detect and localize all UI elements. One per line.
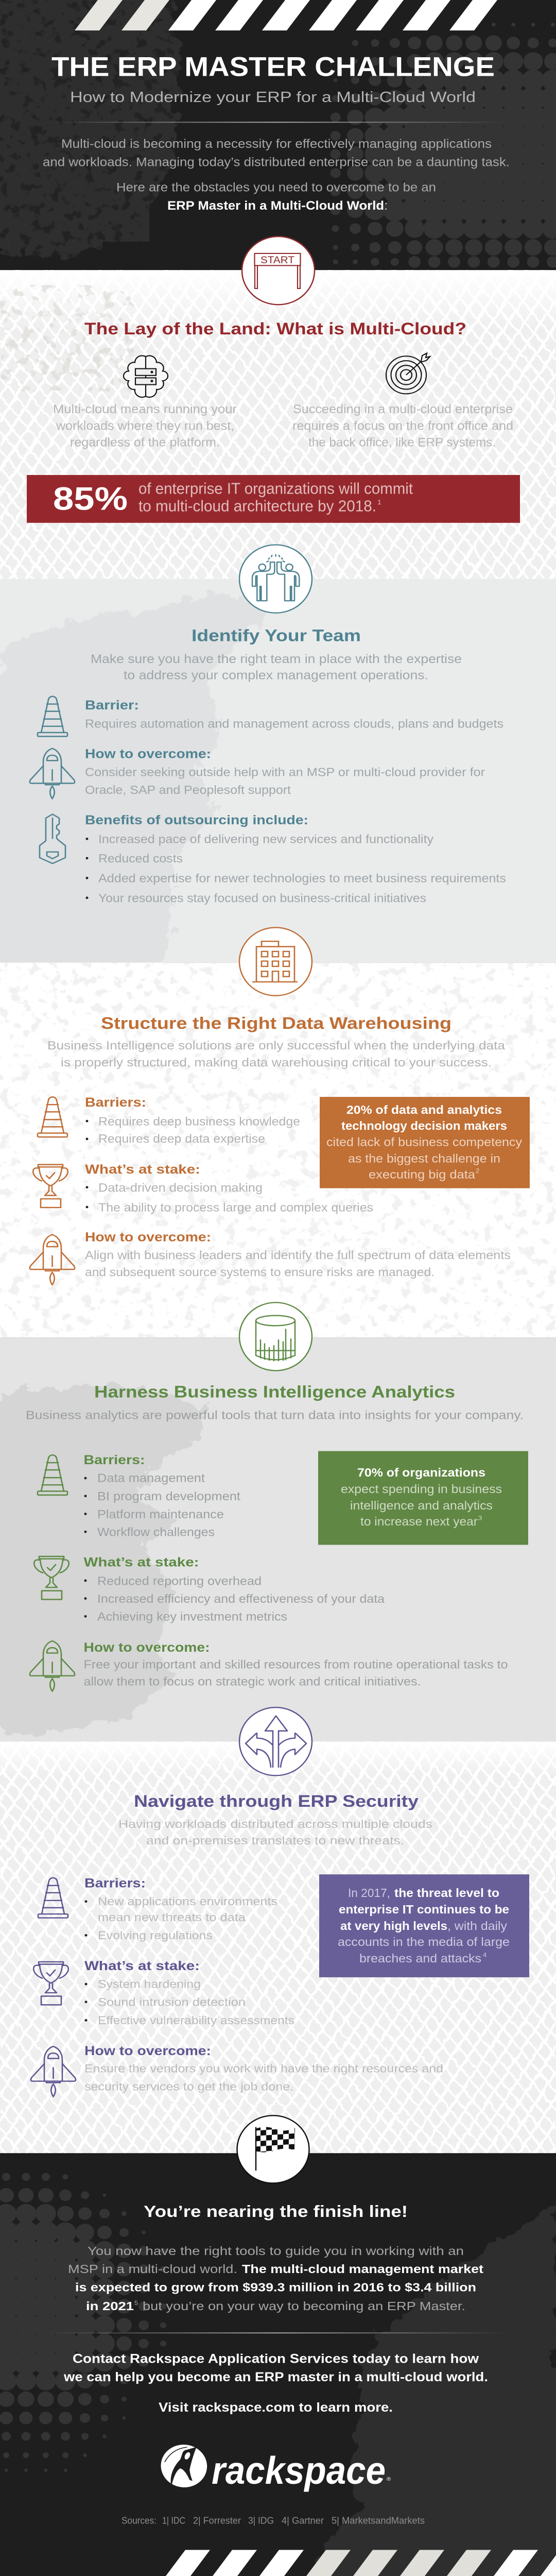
- barriers list: New applications environments: [98, 1895, 277, 1908]
- callout: 85 percent: to multi-cloud architecture by 2018.: [138, 497, 376, 515]
- how to overcome: How to overcome:: [85, 1229, 211, 1244]
- benefits list: Reduced costs: [98, 852, 183, 866]
- panel: finish line footer: [0, 2115, 556, 2576]
- panel: business intelligence analytics: [0, 1302, 556, 1741]
- intro text: Make sure you have the right team in place with the expertise: [91, 652, 462, 666]
- callout: threat level: [319, 1874, 529, 1977]
- what's at stake list: Sound intrusion detection: [98, 1995, 246, 2008]
- callout: 20 percent: [320, 1097, 530, 1188]
- how to overcome: Align with business leaders and identify the full spectrum of data elements: [85, 1249, 511, 1262]
- start icon: [242, 236, 315, 304]
- text: succeeding in multi-cloud: requires a focus on the front office and: [292, 419, 513, 433]
- sources: 3| IDG: [248, 2515, 274, 2527]
- call to action: [63, 2351, 488, 2415]
- intro text: and on-premises translates to new threats.: [146, 1834, 404, 1847]
- summary text: The multi-cloud management market: [242, 2263, 483, 2276]
- what's at stake list: What’s at stake:: [85, 1162, 200, 1177]
- callout: threat level: 4: [483, 1952, 486, 1958]
- what's at stake list: What’s at stake:: [83, 1554, 199, 1570]
- logo: rackspace: [153, 2437, 391, 2495]
- how to overcome: How to overcome:: [85, 746, 211, 761]
- barriers list: Platform maintenance: [97, 1508, 224, 1521]
- icon: trophy: [33, 1164, 68, 1208]
- icon: rocket: [30, 1234, 75, 1285]
- callout: threat level: In 2017,: [348, 1887, 390, 1900]
- benefits list: Benefits of outsourcing include:: [85, 812, 308, 827]
- intro text: and workloads. Managing today’s distributed enterprise can be a daunting task.: [43, 155, 510, 169]
- benefits list: Added expertise for newer technologies to meet business requirements: [98, 872, 506, 885]
- barriers list: Barriers:: [83, 1452, 145, 1467]
- sources: Sources:: [121, 2515, 157, 2527]
- callout: 85 percent: 85%: [53, 480, 128, 517]
- text: multi-cloud meaning: regardless of the platform.: [70, 435, 220, 449]
- summary text: 5: [134, 2299, 138, 2307]
- how to overcome: Ensure the vendors you work with have the right resources and: [84, 2062, 443, 2075]
- how to overcome: Free your important and skilled resources from routine operational tasks to: [83, 1658, 508, 1671]
- how to overcome: Consider seeking outside help with an MSP or multi-cloud provider for: [85, 766, 485, 779]
- heading: You’re nearing the finish line!: [144, 2202, 408, 2221]
- icon: cone: [38, 1878, 68, 1918]
- intro text: to address your complex management operations.: [124, 668, 428, 683]
- call to action: Contact Rackspace Application Services today to learn how: [73, 2351, 479, 2366]
- text: succeeding in multi-cloud: [292, 402, 513, 449]
- callout: 20 percent: as the biggest challenge in: [348, 1152, 500, 1165]
- barriers list: Evolving regulations: [98, 1929, 213, 1942]
- callout: threat level: enterprise IT continues to be: [339, 1903, 509, 1917]
- text: multi-cloud meaning: workloads where they run best,: [56, 419, 234, 433]
- barriers list: mean new threats to data: [98, 1911, 246, 1924]
- benefits list: Increased pace of delivering new services and functionality: [98, 833, 434, 846]
- benefits list: Your resources stay focused on business-critical initiatives: [98, 892, 426, 905]
- intro text: [43, 137, 510, 213]
- barriers list: [84, 1875, 277, 1942]
- intro text: Multi-cloud is becoming a necessity for effectively managing applications: [61, 137, 492, 151]
- what's at stake list: Data-driven decision making: [98, 1181, 263, 1195]
- icon: target with arrow: [386, 353, 430, 394]
- text: multi-cloud meaning: Multi-cloud means running your: [53, 402, 237, 416]
- callout: 20 percent: executing big data: [369, 1168, 476, 1181]
- call to action: we can help you become an ERP master in a multi-cloud world.: [63, 2369, 488, 2384]
- barriers list: [83, 1452, 240, 1539]
- callout: 70 percent: 70% of organizations: [357, 1466, 485, 1480]
- panel: ERP security: [0, 1707, 556, 2154]
- what's at stake list: [85, 1162, 373, 1214]
- callout: 85 percent: of enterprise IT organizations will commit: [138, 479, 413, 497]
- intro text: is properly structured, making data warehousing critical to your success.: [61, 1056, 492, 1070]
- heading: The Lay of the Land: What is Multi-Cloud?: [84, 319, 466, 338]
- title: THE ERP MASTER CHALLENGE: [51, 52, 495, 82]
- text: succeeding in multi-cloud: Succeeding in a multi-cloud enterprise: [293, 402, 513, 416]
- intro text: [47, 1039, 506, 1070]
- summary text: but you’re on your way to becoming an ERP Master.: [143, 2300, 465, 2313]
- heading: Navigate through ERP Security: [134, 1792, 419, 1811]
- icon: cone: [38, 697, 67, 736]
- intro text: Having workloads distributed across multiple clouds: [118, 1818, 432, 1831]
- icon: team high five: [239, 545, 312, 613]
- barriers list: Data management: [97, 1471, 205, 1485]
- panel: data warehousing: [0, 927, 556, 1337]
- intro text: :: [384, 199, 388, 213]
- summary text: is expected to grow from $939.3 million in 2016 to $3.4 billion: [75, 2281, 476, 2294]
- how to overcome: How to overcome:: [83, 1640, 210, 1655]
- sources: 2| Forrester: [193, 2515, 241, 2527]
- callout: 85 percent: 1: [377, 499, 381, 506]
- intro text: Business analytics are powerful tools that turn data into insights for your company.: [26, 1409, 524, 1422]
- barriers list: Barriers:: [85, 1095, 146, 1110]
- summary text: [68, 2245, 483, 2313]
- barriers list: [85, 1095, 300, 1146]
- callout: 20 percent: 20% of data and analytics: [346, 1104, 502, 1117]
- sources: [121, 2515, 425, 2527]
- callout: threat level: breaches and attacks: [359, 1952, 481, 1965]
- icon: rocket: [31, 2046, 76, 2097]
- heading: Identify Your Team: [192, 626, 361, 645]
- subtitle: How to Modernize your ERP for a Multi-Cloud World: [70, 89, 476, 106]
- callout: 70 percent: 3: [478, 1515, 482, 1522]
- intro text: ERP Master in a Multi-Cloud World: [167, 199, 384, 213]
- icon: cone: [38, 1455, 67, 1495]
- icon: checkered flag: [237, 2115, 309, 2183]
- sources: 4| Gartner: [282, 2515, 324, 2527]
- text: multi-cloud meaning: [53, 402, 237, 449]
- callout: 70 percent: expect spending in business: [341, 1483, 502, 1496]
- icon: database chart: [239, 1302, 312, 1370]
- heading: Structure the Right Data Warehousing: [101, 1014, 451, 1033]
- panel: what is multi-cloud: [0, 236, 556, 580]
- icon: trophy: [33, 1962, 68, 2005]
- icon: rocket: [30, 749, 75, 799]
- benefits list: [85, 812, 506, 905]
- callout: 20 percent: technology decision makers: [341, 1120, 507, 1133]
- icon: cloud server: [124, 355, 168, 397]
- icon: cone: [38, 1097, 67, 1137]
- callout: threat level: the threat level to: [394, 1887, 499, 1900]
- heading: Harness Business Intelligence Analytics: [94, 1382, 455, 1401]
- sources: 5| MarketsandMarkets: [332, 2515, 425, 2527]
- intro text: [118, 1818, 432, 1847]
- what's at stake list: [83, 1554, 385, 1624]
- what's at stake list: System hardening: [98, 1977, 201, 1990]
- what's at stake list: Increased efficiency and effectiveness of your data: [97, 1592, 385, 1606]
- summary text: in 2021: [86, 2300, 134, 2313]
- callout: 20 percent: cited lack of business competency: [326, 1136, 523, 1149]
- callout: 70 percent: to increase next year: [360, 1515, 478, 1529]
- barriers list: Requires deep business knowledge: [98, 1115, 300, 1128]
- clapper stripes top: [75, 0, 497, 30]
- icon: diverging arrows: [239, 1707, 312, 1775]
- how to overcome: security services to get the job done.: [84, 2080, 293, 2093]
- what's at stake list: The ability to process large and complex queries: [98, 1201, 373, 1214]
- sources: 1| IDC: [162, 2515, 185, 2527]
- icon: trophy: [34, 1556, 69, 1599]
- call to action: Visit rackspace.com to learn more.: [159, 2400, 393, 2415]
- callout: threat level: accounts in the media of large: [338, 1936, 510, 1949]
- callout: 70 percent: intelligence and analytics: [350, 1499, 493, 1513]
- intro text: Business Intelligence solutions are only successful when the underlying data: [47, 1039, 506, 1053]
- callout: 85 percent: [27, 475, 520, 523]
- callout: threat level: , with daily: [447, 1920, 508, 1933]
- what's at stake list: Effective vulnerability assessments: [98, 2014, 294, 2027]
- what's at stake list: [84, 1958, 294, 2027]
- how to overcome: How to overcome:: [84, 2043, 211, 2058]
- summary text: MSP in a multi-cloud world.: [68, 2263, 237, 2276]
- panel: hero header: [0, 0, 556, 270]
- how to overcome: and subsequent source systems to ensure risks are managed.: [85, 1266, 435, 1279]
- how to overcome: allow them to focus on strategic work and critical initiatives.: [83, 1675, 421, 1688]
- callout: 20 percent: 2: [476, 1167, 479, 1174]
- how to overcome: [83, 1640, 508, 1688]
- panel: identify your team: [0, 545, 556, 962]
- how to overcome: [85, 746, 485, 797]
- callout: 70 percent: [318, 1451, 528, 1545]
- how to overcome: Oracle, SAP and Peoplesoft support: [85, 784, 291, 797]
- logo: rackspace: rackspace: [212, 2449, 386, 2492]
- barriers list: Requires deep data expertise: [98, 1132, 265, 1146]
- intro text: Here are the obstacles you need to overcome to be an: [116, 180, 436, 194]
- barrier: Barrier:: [85, 698, 139, 713]
- what's at stake list: Reduced reporting overhead: [97, 1574, 262, 1588]
- logo: rackspace: ®: [387, 2477, 391, 2482]
- what's at stake list: What’s at stake:: [84, 1958, 200, 1973]
- barriers list: BI program development: [97, 1490, 240, 1503]
- what's at stake list: Achieving key investment metrics: [97, 1610, 287, 1624]
- how to overcome: [85, 1229, 511, 1279]
- icon: building: [239, 927, 312, 996]
- icon: key: [40, 814, 65, 863]
- how to overcome: [84, 2043, 443, 2093]
- barriers list: Barriers:: [84, 1875, 146, 1890]
- start icon: START: [260, 255, 294, 266]
- barrier: Requires automation and management across clouds, plans and budgets: [85, 717, 503, 731]
- summary text: You now have the right tools to guide you in working with an: [88, 2245, 464, 2258]
- text: succeeding in multi-cloud: the back office, like ERP systems.: [308, 435, 496, 449]
- barrier: [85, 698, 503, 731]
- intro text: [91, 652, 462, 683]
- barriers list: Workflow challenges: [97, 1526, 215, 1539]
- clapper stripes bottom: [166, 2550, 556, 2576]
- icon: rocket: [30, 1641, 75, 1691]
- callout: threat level: at very high levels: [340, 1920, 447, 1933]
